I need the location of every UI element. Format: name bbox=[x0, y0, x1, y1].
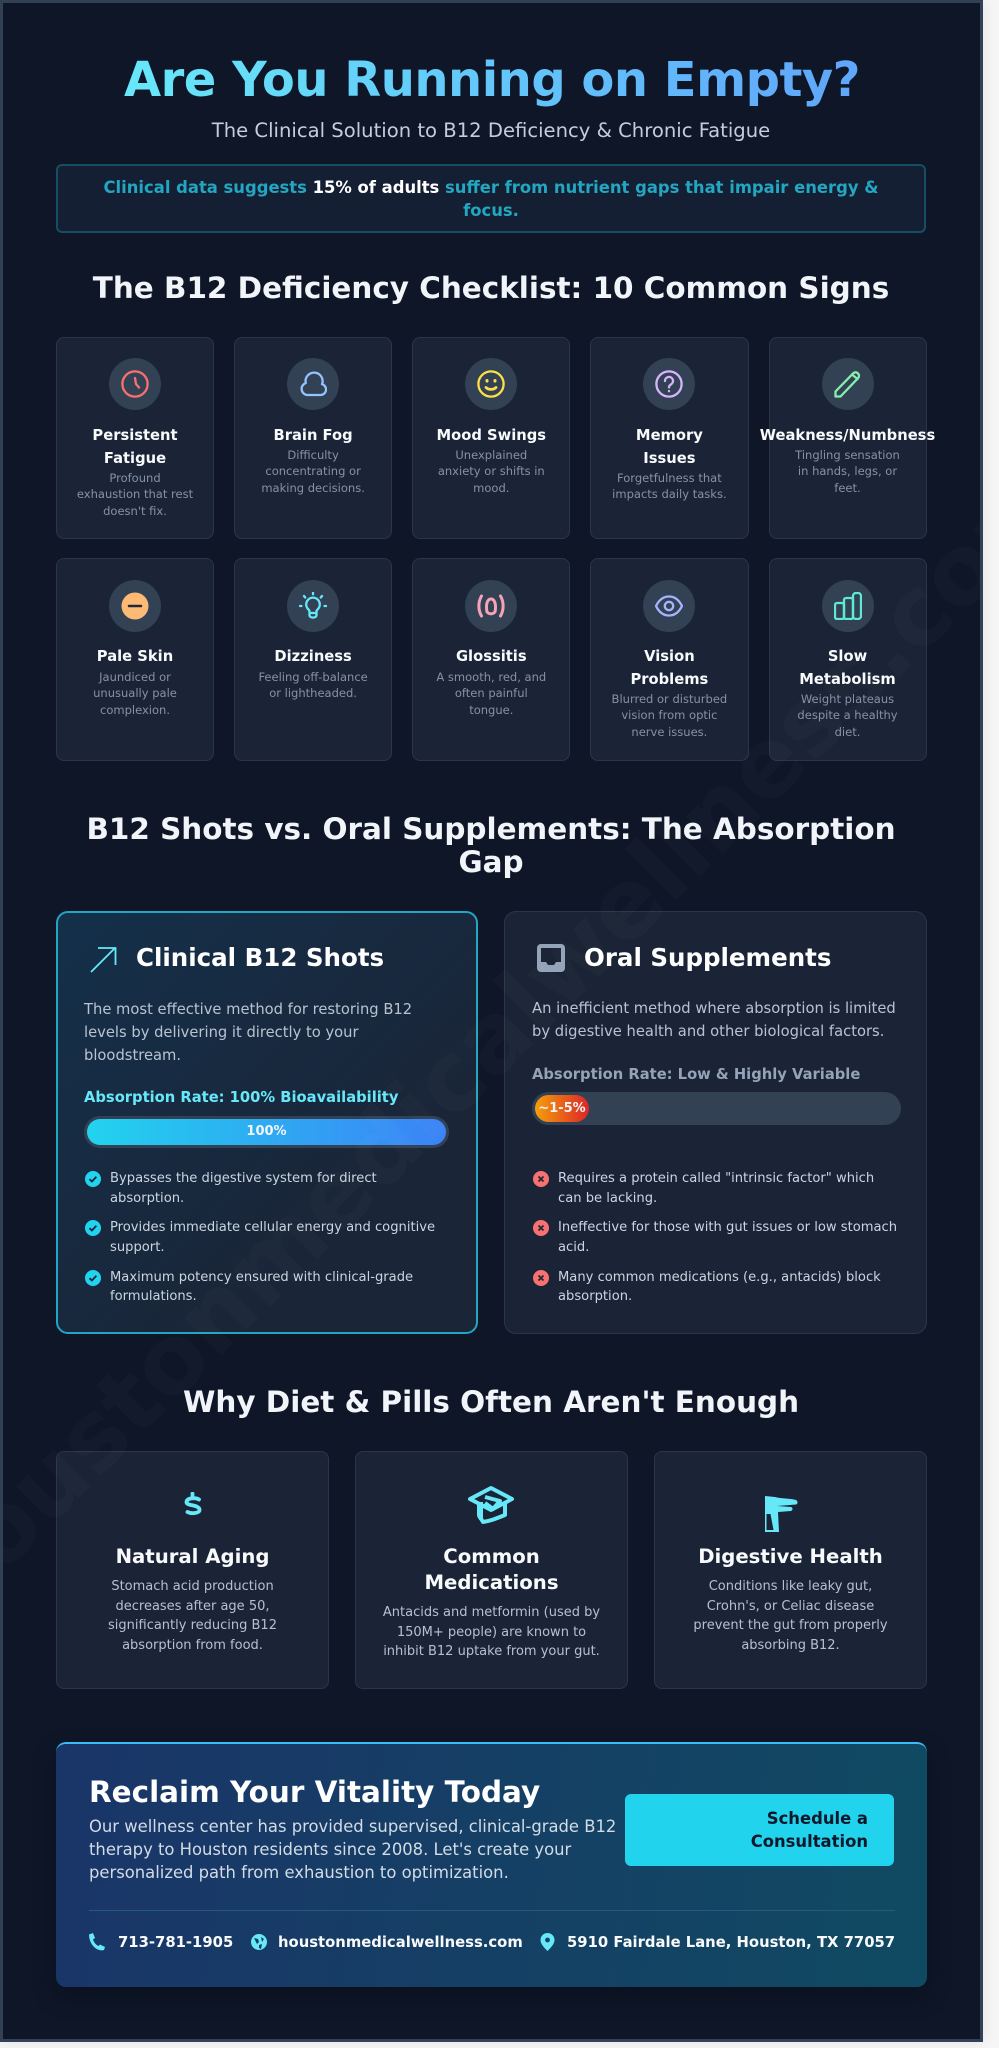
sign card: persistent fatigue: exhaustion that rest bbox=[77, 487, 193, 501]
CTA description: Our wellness center has provided supervised, clinical-grade B12 bbox=[89, 1817, 616, 1836]
sign card: brain fog: making decisions. bbox=[261, 481, 365, 495]
absorption bar 1-5%: ~1-5% bbox=[538, 1101, 586, 1116]
drawback 3: Many common medications (e.g., antacids) block bbox=[558, 1270, 881, 1285]
card heading: Clinical B12 Shots bbox=[136, 943, 384, 972]
sign card: vision problems: vision from optic bbox=[621, 708, 717, 722]
callout: 15% of adults statistic: Clinical data suggests 15% of adults suffer from nutrient gaps that impair energy & bbox=[104, 178, 878, 197]
benefit 3: Maximum potency ensured with clinical-grade bbox=[110, 1270, 413, 1285]
benefit 2: Provides immediate cellular energy and cognitive bbox=[110, 1220, 435, 1235]
sign card: glossitis: often painful bbox=[455, 686, 528, 700]
sign card: weakness numbness: Tingling sensation bbox=[795, 448, 900, 462]
sign card: weakness numbness bbox=[768, 337, 927, 539]
icon: phone bbox=[89, 1933, 105, 1950]
benefit 1: Bypasses the digestive system for direct bbox=[110, 1171, 377, 1186]
description: absorption from food. bbox=[122, 1638, 263, 1653]
phone number: 713-781-1905 bbox=[118, 1934, 233, 1951]
CTA heading: Reclaim Your Vitality Today bbox=[89, 1775, 540, 1809]
sign card: dizziness bbox=[234, 558, 392, 761]
description: levels by delivering it directly to your bbox=[84, 1024, 359, 1041]
sign card: persistent fatigue: Profound bbox=[109, 471, 161, 485]
sign card: brain fog bbox=[234, 337, 392, 539]
benefit 2 bbox=[85, 1220, 435, 1255]
card title: Digestive Health bbox=[698, 1545, 883, 1568]
icon: inbox tray bbox=[537, 944, 565, 972]
card title bbox=[424, 1545, 559, 1594]
description: Conditions like leaky gut, bbox=[709, 1579, 872, 1594]
sign card: pale skin: unusually pale bbox=[93, 686, 177, 700]
sign card: brain fog: concentrating or bbox=[265, 464, 361, 478]
sign card: weakness numbness: in hands, legs, or bbox=[798, 464, 897, 478]
sign card: dizziness: Feeling off-balance bbox=[258, 670, 368, 684]
sign card: slow metabolism bbox=[768, 558, 927, 761]
drawback 2 bbox=[533, 1220, 897, 1255]
sign card: slow metabolism: diet. bbox=[835, 725, 860, 739]
description: by digestive health and other biological factors. bbox=[532, 1023, 884, 1040]
description: decreases after age 50, bbox=[115, 1599, 270, 1614]
sign card: mood swings bbox=[412, 337, 570, 539]
panel: clinical B12 shots bbox=[56, 911, 478, 1334]
sign card: memory issues: impacts daily tasks. bbox=[612, 487, 727, 501]
card title: Medications bbox=[424, 1571, 559, 1594]
description bbox=[84, 1001, 412, 1064]
CTA description: therapy to Houston residents since 2008. Let's create your bbox=[89, 1840, 571, 1859]
description: 150M+ people) are known to bbox=[397, 1625, 586, 1640]
divider bbox=[89, 1910, 895, 1911]
sign card: pale skin: Jaundiced or bbox=[99, 670, 171, 684]
heading: why diet and pills: Why Diet & Pills Often Aren't Enough bbox=[183, 1385, 799, 1419]
description bbox=[693, 1579, 888, 1653]
sign card: glossitis: Glossitis bbox=[456, 648, 527, 665]
drawback 3: absorption. bbox=[558, 1289, 632, 1304]
callout: 15% of adults statistic: focus. bbox=[463, 201, 519, 220]
sign card: weakness numbness: feet. bbox=[834, 481, 861, 495]
website: houstonmedicalwellness.com bbox=[278, 1934, 523, 1951]
sign card: persistent fatigue: doesn't fix. bbox=[103, 504, 167, 518]
card title: Common bbox=[443, 1545, 540, 1568]
callout: 15% of adults statistic bbox=[56, 164, 926, 233]
sign card: persistent fatigue: Fatigue bbox=[104, 450, 166, 467]
sign card: dizziness: or lightheaded. bbox=[269, 686, 357, 700]
sign card: mood swings: mood. bbox=[473, 481, 509, 495]
sign card: mood swings: anxiety or shifts in bbox=[438, 464, 545, 478]
sign card: vision problems: Blurred or disturbed bbox=[612, 692, 727, 706]
reason card: common medications bbox=[355, 1451, 628, 1689]
absorption bar 1-5% bbox=[532, 1092, 901, 1125]
icon: digestive tract bbox=[765, 1496, 798, 1532]
description: Crohn's, or Celiac disease bbox=[707, 1599, 874, 1614]
sign card: mood swings: Unexplained bbox=[455, 448, 527, 462]
absorption bar 100% bbox=[84, 1116, 449, 1148]
absorption bar 100%: 100% bbox=[246, 1124, 287, 1139]
sign card: mood swings: Mood Swings bbox=[437, 427, 546, 444]
drawback 1 bbox=[533, 1171, 874, 1206]
sign card: glossitis: A smooth, red, and bbox=[436, 670, 546, 684]
CTA description bbox=[89, 1817, 616, 1882]
icon: dollar bbox=[184, 1492, 202, 1516]
card heading: Oral Supplements bbox=[584, 943, 831, 972]
sign card: vision problems: nerve issues. bbox=[631, 725, 707, 739]
sign card: memory issues: Forgetfulness that bbox=[617, 471, 722, 485]
sign card: weakness numbness: Weakness/Numbness bbox=[760, 427, 935, 444]
sign card: pale skin: Pale Skin bbox=[97, 648, 173, 665]
heading: absorption gap: B12 Shots vs. Oral Supplements: The Absorption bbox=[86, 812, 896, 846]
sign card: brain fog: Brain Fog bbox=[274, 427, 353, 444]
drawback 2: Ineffective for those with gut issues or low stomach bbox=[558, 1220, 897, 1235]
CTA button bbox=[625, 1794, 894, 1866]
sign card: pale skin: complexion. bbox=[100, 703, 170, 717]
call to action panel bbox=[56, 1742, 927, 1987]
description bbox=[532, 1000, 896, 1040]
sign card: memory issues: Memory bbox=[636, 427, 703, 444]
sign card: dizziness: Dizziness bbox=[274, 648, 352, 665]
address: 5910 Fairdale Lane, Houston, TX 77057 bbox=[567, 1934, 895, 1951]
icon: graduation cap bbox=[468, 1486, 514, 1524]
sign card: slow metabolism: despite a healthy bbox=[797, 708, 898, 722]
icon: arrow up right bbox=[90, 947, 116, 973]
description: An inefficient method where absorption is limited bbox=[532, 1000, 896, 1017]
sign card: persistent fatigue: Persistent bbox=[92, 427, 178, 444]
panel: oral supplements bbox=[504, 911, 927, 1334]
description: significantly reducing B12 bbox=[108, 1618, 277, 1633]
reason card: natural aging bbox=[56, 1451, 329, 1689]
sign card: slow metabolism: Slow bbox=[828, 648, 867, 665]
benefit 3: formulations. bbox=[110, 1289, 197, 1304]
sign card: vision problems: Vision bbox=[644, 648, 695, 665]
description: The most effective method for restoring B12 bbox=[84, 1001, 412, 1018]
description: inhibit B12 uptake from your gut. bbox=[383, 1644, 600, 1659]
absorption label: Absorption Rate: 100% Bioavailability bbox=[84, 1089, 398, 1106]
drawback 2: acid. bbox=[558, 1240, 589, 1255]
contact row bbox=[89, 1933, 895, 1951]
icon: globe bbox=[251, 1934, 267, 1950]
sign card: brain fog: Difficulty bbox=[287, 448, 339, 462]
description: prevent the gut from properly bbox=[693, 1618, 888, 1633]
sign card: glossitis: tongue. bbox=[469, 703, 513, 717]
sign card: slow metabolism: Metabolism bbox=[799, 671, 896, 688]
benefit 1: absorption. bbox=[110, 1191, 184, 1206]
sign card: memory issues: Issues bbox=[643, 450, 696, 467]
sign card: persistent fatigue bbox=[56, 337, 214, 539]
sign card: pale skin bbox=[56, 558, 214, 761]
benefit 2: support. bbox=[110, 1240, 164, 1255]
description bbox=[108, 1579, 277, 1653]
CTA button: Consultation bbox=[751, 1832, 868, 1851]
card title: Natural Aging bbox=[116, 1545, 269, 1568]
drawback 3 bbox=[533, 1270, 881, 1304]
description: bloodstream. bbox=[84, 1047, 181, 1064]
description bbox=[383, 1605, 600, 1659]
heading: absorption gap: Gap bbox=[458, 845, 524, 879]
sign card: vision problems bbox=[590, 558, 749, 761]
sign card: memory issues bbox=[590, 337, 749, 539]
description: Antacids and metformin (used by bbox=[383, 1605, 600, 1620]
absorption label: Absorption Rate: Low & Highly Variable bbox=[532, 1066, 860, 1083]
sign card: glossitis bbox=[412, 558, 570, 761]
description: absorbing B12. bbox=[741, 1638, 840, 1653]
drawback 1: can be lacking. bbox=[558, 1191, 657, 1206]
sign card: slow metabolism: Weight plateaus bbox=[801, 692, 894, 706]
icon: map pin bbox=[540, 1933, 554, 1951]
description: Stomach acid production bbox=[111, 1579, 274, 1594]
benefit 3 bbox=[85, 1270, 413, 1304]
title: Are You Running on Empty? bbox=[124, 52, 860, 108]
sign card: vision problems: Problems bbox=[630, 671, 708, 688]
reason card: digestive health bbox=[654, 1451, 927, 1689]
subtitle: The Clinical Solution to B12 Deficiency & Chronic Fatigue bbox=[212, 119, 770, 142]
CTA button: Schedule a bbox=[767, 1809, 868, 1828]
heading: absorption gap bbox=[86, 812, 896, 879]
benefit 1 bbox=[85, 1171, 377, 1206]
heading: checklist: The B12 Deficiency Checklist: 10 Common Signs bbox=[93, 271, 889, 305]
CTA description: personalized path from exhaustion to optimization. bbox=[89, 1863, 509, 1882]
drawback 1: Requires a protein called "intrinsic factor" which bbox=[558, 1171, 874, 1186]
